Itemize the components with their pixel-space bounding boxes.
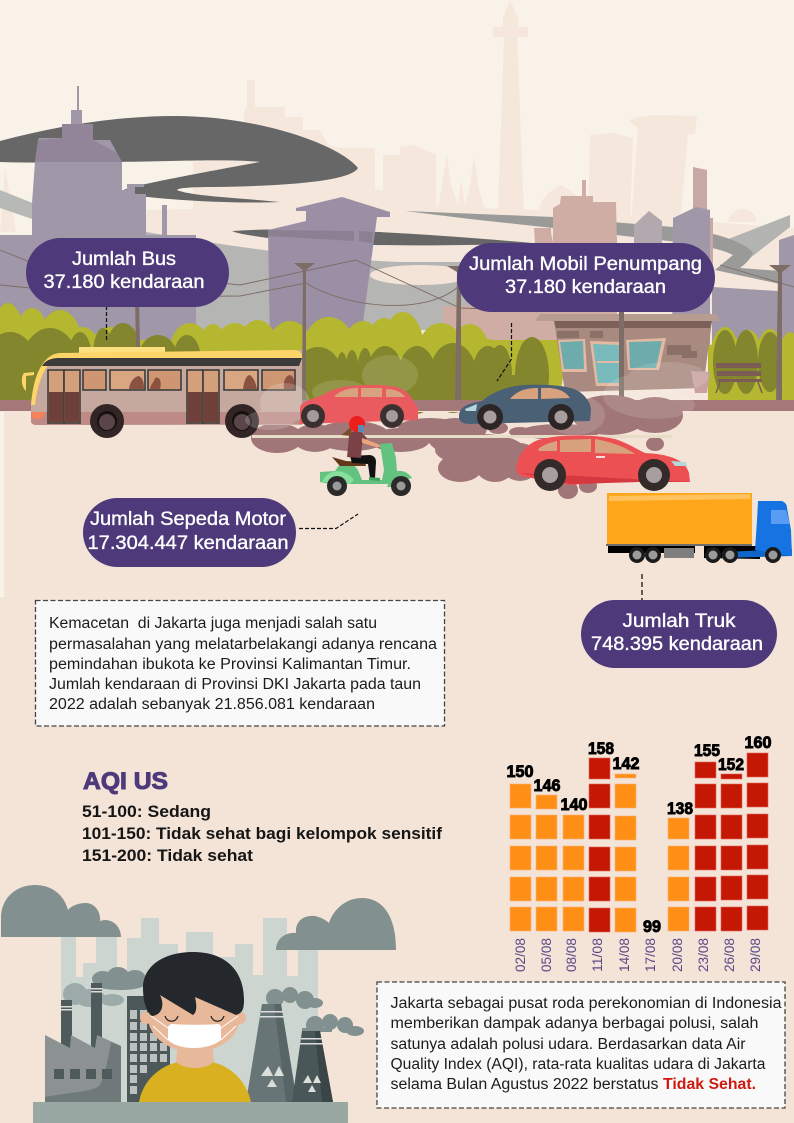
hazy smoke behind cars bbox=[312, 355, 418, 404]
value labels: 99 bbox=[643, 917, 661, 936]
text block: polusi udara: satunya adalah polusi udara. Berdasarkan data Air bbox=[390, 1036, 746, 1053]
pill: jumlah bus: Jumlah Bus bbox=[72, 249, 176, 270]
factory building bbox=[45, 983, 121, 1102]
pill: jumlah sepeda motor bbox=[83, 498, 296, 567]
text block: kemacetan: Jumlah kendaraan di Provinsi DKI Jakarta pada taun bbox=[49, 676, 421, 693]
office tower bbox=[127, 996, 170, 1102]
distant beige landmarks bbox=[0, 0, 794, 411]
large red car bbox=[516, 435, 690, 491]
bus windows bbox=[48, 370, 295, 423]
boy bbox=[139, 952, 251, 1102]
grey elevated road bbox=[0, 190, 794, 330]
small red car bbox=[300, 385, 418, 428]
text block: kemacetan: permasalahan yang melatarbelakangi adanya rencana bbox=[49, 636, 437, 653]
orange columns bbox=[510, 774, 689, 932]
road centre line bbox=[252, 435, 672, 438]
bus bbox=[22, 347, 302, 438]
value labels: 138 bbox=[667, 799, 693, 818]
pill: jumlah sepeda motor: Jumlah Sepeda Motor bbox=[90, 509, 287, 530]
value labels: 160 bbox=[744, 733, 772, 752]
roadside shop bbox=[535, 312, 762, 405]
date labels: 11/08 bbox=[590, 938, 605, 972]
haze behind bus tail bbox=[245, 383, 310, 430]
value labels bbox=[506, 733, 772, 936]
right cloud bbox=[276, 898, 396, 950]
value labels: 142 bbox=[612, 754, 640, 773]
pill: jumlah sepeda motor: 17.304.447 kendaraan bbox=[88, 533, 288, 554]
truck bbox=[606, 493, 792, 563]
text block: kemacetan: Kemacetan di Jakarta juga menjadi salah satu bbox=[49, 615, 377, 632]
cooling towers bbox=[246, 1004, 333, 1102]
pill: jumlah truk: 748.395 kendaraan bbox=[591, 634, 763, 655]
value labels: 155 bbox=[694, 741, 720, 760]
left cloud bbox=[1, 885, 121, 937]
pill: jumlah mobil penumpang bbox=[457, 243, 715, 312]
power lines bbox=[0, 250, 794, 310]
bar chart: daily AQI bbox=[506, 733, 772, 972]
city skyline illustration bbox=[0, 0, 794, 414]
date labels: 20/08 bbox=[670, 938, 685, 972]
value labels: 146 bbox=[534, 776, 560, 795]
date labels: 23/08 bbox=[696, 938, 711, 972]
value labels: 158 bbox=[588, 739, 614, 758]
date labels: 26/08 bbox=[722, 938, 737, 972]
date labels: 14/08 bbox=[617, 938, 632, 972]
face mask bbox=[168, 1024, 221, 1048]
pill: jumlah mobil penumpang: Jumlah Mobil Penumpang bbox=[469, 254, 702, 275]
purple and pink buildings bbox=[0, 86, 794, 345]
scooter rider bbox=[320, 416, 412, 496]
date labels: 08/08 bbox=[564, 938, 579, 972]
AQI legend: 151-200: Tidak sehat bbox=[82, 847, 254, 865]
date labels: 17/08 bbox=[643, 938, 658, 972]
text block: kemacetan: 2022 adalah sebanyak 21.856.081 kendaraan bbox=[49, 696, 375, 713]
pointer lines bbox=[106, 306, 642, 600]
text block: kemacetan bbox=[36, 600, 444, 726]
illustration: boy with mask and polluting factories bbox=[1, 885, 396, 1123]
bus wheels bbox=[90, 404, 259, 438]
value labels: 150 bbox=[506, 762, 534, 781]
pill: jumlah truk bbox=[581, 600, 777, 668]
haze over shop bbox=[545, 362, 708, 435]
pill: jumlah bus: 37.180 kendaraan bbox=[44, 272, 204, 293]
red columns bbox=[589, 753, 768, 932]
value labels: 140 bbox=[560, 795, 588, 814]
text block: polusi udara: Tidak Sehat. bbox=[663, 1076, 756, 1093]
date labels: 02/08 bbox=[513, 938, 528, 972]
text block: polusi udara: Jakarta sebagai pusat roda perekonomian di Indonesia bbox=[390, 995, 782, 1012]
text block: polusi udara: Quality Index (AQI), rata-rata kualitas udara di Jakarta bbox=[390, 1056, 766, 1073]
blue car bbox=[459, 385, 591, 430]
text block: polusi udara: selama Bulan Agustus 2022 berstatus bbox=[390, 1076, 659, 1093]
exhaust smoke clouds bbox=[251, 395, 683, 499]
pale skyline bbox=[61, 918, 318, 1102]
heading: AQI US: AQI US bbox=[83, 768, 168, 795]
text block: polusi udara bbox=[377, 982, 785, 1108]
AQI legend: 51-100: Sedang bbox=[82, 803, 211, 821]
pill: jumlah truk: Jumlah Truk bbox=[622, 611, 736, 632]
ground strip bbox=[0, 400, 794, 412]
front dark bushes bbox=[0, 323, 782, 414]
dark ribbon roads bbox=[0, 116, 532, 245]
text block: kemacetan: pemindahan ibukota ke Provinsi Kalimantan Timur. bbox=[49, 656, 411, 673]
factory smoke bbox=[63, 983, 124, 1007]
AQI legend bbox=[82, 803, 443, 865]
date labels: 29/08 bbox=[748, 938, 763, 972]
rear bushes bbox=[0, 303, 794, 405]
date labels: 05/08 bbox=[539, 938, 554, 972]
pill: jumlah bus bbox=[26, 238, 229, 307]
AQI legend: 101-150: Tidak sehat bagi kelompok sensitif bbox=[82, 825, 443, 843]
ground base bbox=[33, 1102, 348, 1123]
lamp posts bbox=[135, 263, 791, 405]
value labels: 152 bbox=[718, 755, 744, 774]
date labels bbox=[513, 938, 763, 972]
radiation symbols bbox=[261, 1066, 321, 1092]
pill: jumlah mobil penumpang: 37.180 kendaraan bbox=[505, 277, 666, 298]
text block: polusi udara: memberikan dampak adanya berbagai polusi, salah bbox=[390, 1015, 758, 1032]
